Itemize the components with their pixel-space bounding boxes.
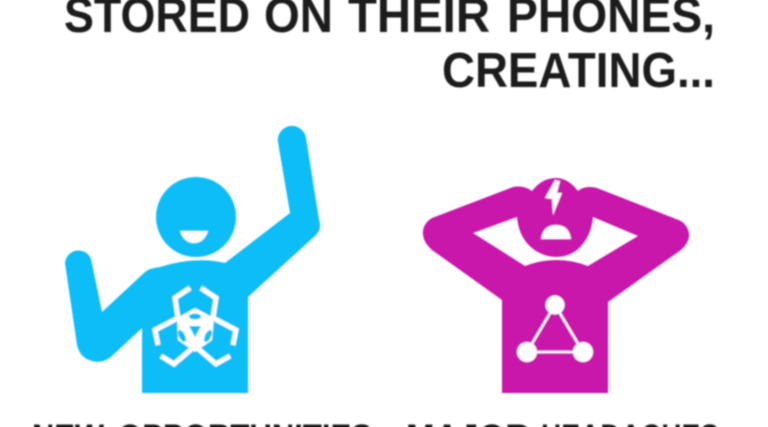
title bbox=[64, 0, 715, 98]
blue body and arms bbox=[65, 126, 320, 393]
top node bbox=[546, 296, 564, 314]
title line 2: CREATING... bbox=[442, 43, 715, 98]
title line 1 bbox=[64, 0, 715, 43]
blue head bbox=[156, 177, 236, 257]
magenta body, arms and head bbox=[423, 178, 689, 393]
biohazard middle cutout bbox=[189, 326, 201, 337]
biohazard right cutout bbox=[203, 329, 213, 343]
biohazard centre bbox=[177, 308, 214, 352]
blue smiling mouth bbox=[180, 231, 208, 243]
figure: magenta person with headache, hands behind head bbox=[423, 178, 689, 393]
icon: biohazard symbol bbox=[155, 288, 236, 364]
label: major headaches bbox=[406, 418, 719, 427]
biohazard top cutout bbox=[189, 314, 201, 320]
triangle links bbox=[527, 305, 583, 352]
biohazard left cutout bbox=[177, 329, 187, 343]
left node bbox=[517, 342, 537, 362]
label: new opportunities bbox=[32, 418, 372, 427]
figure: happy blue person with arms raised bbox=[65, 126, 320, 393]
biohazard hooks bbox=[155, 288, 236, 364]
right node bbox=[573, 342, 593, 362]
icon: lightning bolt bbox=[545, 180, 562, 215]
icon: connected triangle network bbox=[517, 296, 593, 362]
magenta frowning mouth bbox=[541, 225, 571, 239]
